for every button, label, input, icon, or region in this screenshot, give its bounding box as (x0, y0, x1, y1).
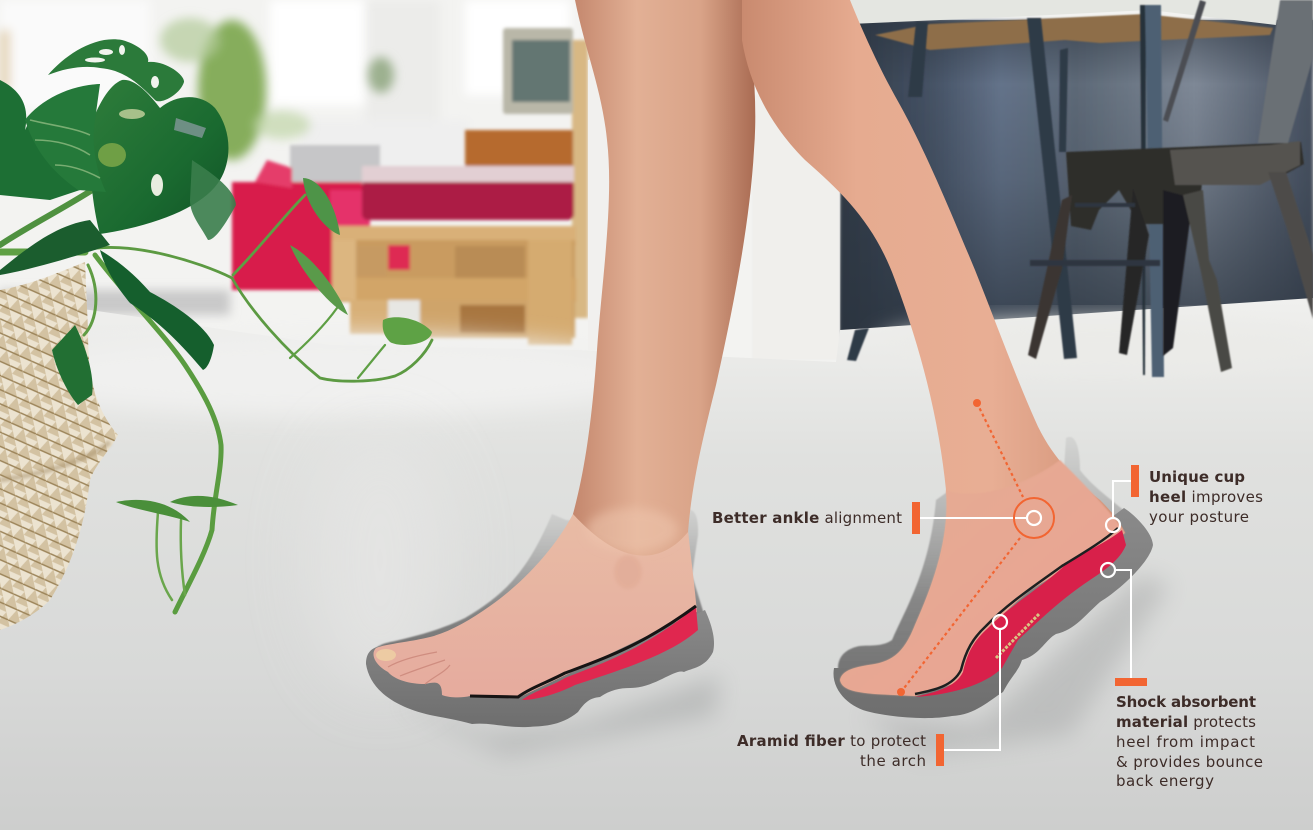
left ankle highlight (586, 508, 678, 552)
trailing small leaves (303, 178, 340, 235)
left shoe halo (372, 510, 712, 660)
left insole edge (470, 606, 696, 697)
leaf holes (98, 109, 206, 196)
callout: aramid fiber: Aramid fiber to protect (737, 732, 926, 750)
right shoe halo (838, 437, 1140, 690)
left toe creases (388, 652, 450, 684)
pallet furniture (232, 28, 588, 345)
floor (0, 298, 1313, 830)
callout: unique cup heel (1106, 465, 1263, 532)
left toe nail (376, 649, 396, 661)
top leaf holes (85, 45, 159, 88)
callout: shock absorbent material: material protects (1116, 713, 1256, 731)
dark wall and white column (588, 20, 1313, 360)
right insole edge (915, 528, 1118, 694)
left shoe (366, 510, 714, 727)
basket (0, 262, 118, 630)
left foot (373, 512, 697, 697)
callout: shock absorbent material (1101, 563, 1263, 790)
callout: unique cup heel: heel improves (1149, 488, 1263, 506)
left ankle bone (614, 555, 642, 589)
chair (1028, 0, 1313, 372)
left leaf (25, 84, 106, 192)
main monstera leaf (88, 80, 228, 234)
left shoe sole (366, 610, 714, 727)
cast shadows on the floor (390, 575, 1170, 755)
callout: shock absorbent material: & provides bounce (1116, 753, 1263, 771)
basket fold (0, 442, 110, 480)
left leaf veins (30, 120, 100, 178)
callout: unique cup heel: Unique cup (1149, 468, 1245, 486)
right shoe (833, 437, 1153, 718)
bottom stem leaves (116, 496, 238, 522)
right shoe sole (833, 508, 1153, 718)
dotted alignment line (897, 399, 1023, 696)
left leg (573, 0, 755, 556)
callout: aramid fiber (737, 615, 1007, 770)
plant stems (0, 185, 432, 612)
callout: shock absorbent material: heel from impact (1116, 733, 1255, 751)
right foot overlay (840, 460, 1125, 696)
table and chairs (847, 0, 1313, 377)
table top (850, 0, 1280, 25)
callout: better ankle alignment (712, 399, 1054, 696)
table wood (875, 14, 1273, 50)
floor glow (0, 320, 1313, 690)
aramid fiber (996, 614, 1039, 658)
callout: aramid fiber: the arch (860, 752, 926, 770)
right insole (915, 528, 1126, 697)
left insole (522, 607, 698, 700)
callout: unique cup heel: your posture (1149, 508, 1249, 526)
background plant (160, 18, 394, 160)
callout: shock absorbent material: Shock absorbent (1116, 693, 1256, 711)
holed top leaf (48, 39, 184, 101)
back left leaf (0, 80, 110, 200)
right leg and foot (742, 0, 1125, 696)
table legs (847, 0, 1206, 377)
basket leaf (52, 325, 93, 405)
callout: shock absorbent material: back energy (1116, 772, 1214, 790)
callout: better ankle alignment: Better ankle alignment (712, 509, 902, 527)
lower drooping leaves (100, 250, 214, 370)
monstera plant (0, 39, 432, 612)
